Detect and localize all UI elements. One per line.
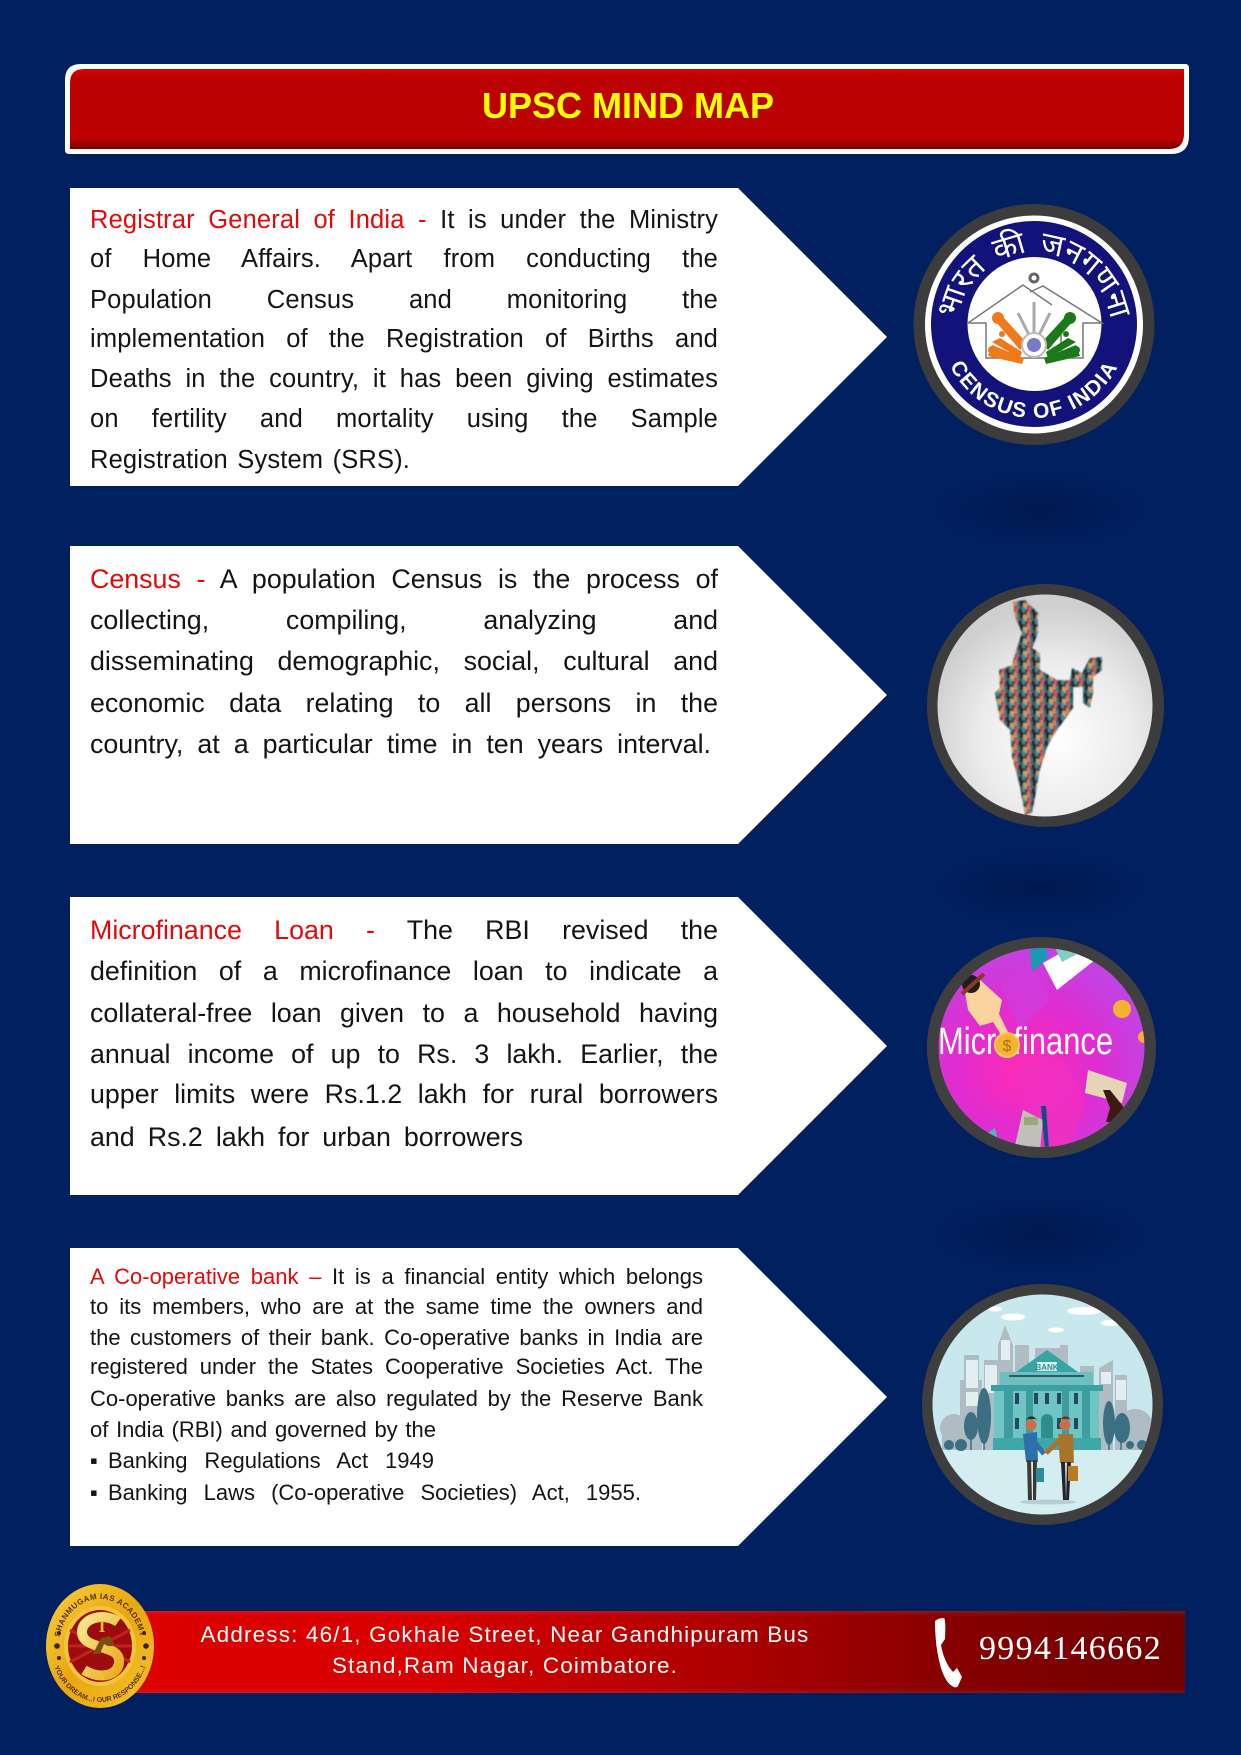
icon: microfinance illustration: Microfinance	[938, 1021, 1113, 1063]
text: co-operative bank description: Co-operative banks are also regulated by the Reserve Bank	[90, 1386, 703, 1411]
panel: Microfinance Loan	[70, 897, 887, 1195]
text: microfinance description: upper limits were Rs.1.2 lakh for rural borrowers	[90, 1079, 718, 1109]
text: census description: collecting, compiling, analyzing and	[90, 605, 718, 635]
text: registrar description: implementation of the Registration of Births and	[90, 325, 718, 353]
icon: academy gold seal logo: I	[99, 1617, 106, 1636]
text: microfinance description	[90, 915, 718, 1152]
icon: microfinance illustration	[927, 937, 1156, 1158]
text: co-operative bank description: Banking Laws (Co-operative Societies) Act, 1955.	[108, 1480, 641, 1505]
panel: Census	[70, 546, 887, 844]
text: co-operative bank description: Banking Regulations Act 1949	[108, 1448, 434, 1473]
icon: academy gold seal logo: A	[95, 1669, 106, 1684]
text: co-operative bank description	[90, 1264, 703, 1505]
icon: bank and handshake illustration	[922, 1284, 1163, 1525]
text: census description: country, at a particular time in ten years interval.	[90, 729, 711, 759]
footer band	[130, 1611, 1185, 1693]
address text	[200, 1622, 809, 1678]
text: microfinance description: annual income of up to Rs. 3 lakh. Earlier, the	[90, 1039, 718, 1069]
soft shadows behind icons	[987, 491, 1092, 1254]
text: census description: economic data relating to all persons in the	[90, 688, 718, 718]
text: registrar description	[90, 206, 718, 474]
icon: census of india emblem: CENSUS OF INDIA	[952, 362, 1118, 418]
panel: Registrar General of India	[70, 188, 887, 486]
text: co-operative bank description: to its members, who are at the same time the owners and	[90, 1294, 703, 1319]
address text: Address: 46/1, Gokhale Street, Near Gandhipuram Bus	[201, 1622, 809, 1647]
text: co-operative bank description: ▪	[90, 1448, 98, 1473]
text: registrar description: Population Census and monitoring the	[90, 286, 718, 314]
text: co-operative bank description: A Co-operative bank – It is a financial entity which belongs	[90, 1264, 703, 1289]
icon: bank and handshake illustration: BANK	[1035, 1363, 1059, 1372]
text: co-operative bank description: of India (RBI) and governed by the	[90, 1417, 436, 1442]
text: co-operative bank description: registered under the States Cooperative Societies Act. The	[90, 1354, 703, 1379]
icon: academy gold seal logo: SHANMUGAM IAS ACADEMY	[54, 1594, 146, 1637]
icon: census of india emblem	[914, 204, 1154, 445]
text: census description	[90, 564, 718, 759]
address text: Stand,Ram Nagar, Coimbatore.	[332, 1653, 678, 1678]
icon: microfinance illustration: $	[1003, 1038, 1012, 1055]
text: registrar description: Deaths in the country, it has been giving estimates	[90, 365, 718, 393]
text: co-operative bank description: ▪	[90, 1480, 98, 1505]
text: registrar description: Registration System (SRS).	[90, 446, 410, 474]
text: microfinance description: definition of a microfinance loan to indicate a	[90, 956, 718, 986]
title banner	[65, 64, 1189, 154]
icon: academy gold seal logo	[46, 1584, 154, 1708]
icon: academy gold seal logo: YOUR DREAM...! OUR RESPONSE...!	[55, 1665, 146, 1702]
text: census description: Census - A population Census is the process of	[90, 564, 718, 594]
icon: census of india emblem: भारत की जनगणना	[939, 228, 1130, 317]
panel: Co-operative bank	[70, 1248, 887, 1546]
phone number: 9994146662	[979, 1630, 1162, 1667]
text: registrar description: of Home Affairs. Apart from conducting the	[90, 245, 718, 273]
text: co-operative bank description: the customers of their bank. Co-operative banks in India are	[90, 1325, 703, 1350]
text: registrar description: Registrar General of India - It is under the Ministry	[90, 206, 718, 234]
text: microfinance description: and Rs.2 lakh for urban borrowers	[90, 1122, 523, 1152]
text: census description: disseminating demographic, social, cultural and	[90, 646, 718, 676]
text: microfinance description: Microfinance Loan - The RBI revised the	[90, 915, 718, 945]
icon: india map made of people	[927, 584, 1164, 827]
text: registrar description: on fertility and mortality using the Sample	[90, 405, 718, 433]
title: UPSC MIND MAP	[482, 85, 774, 126]
text: microfinance description: collateral-free loan given to a household having	[90, 998, 718, 1028]
icon: telephone handset	[935, 1618, 962, 1688]
